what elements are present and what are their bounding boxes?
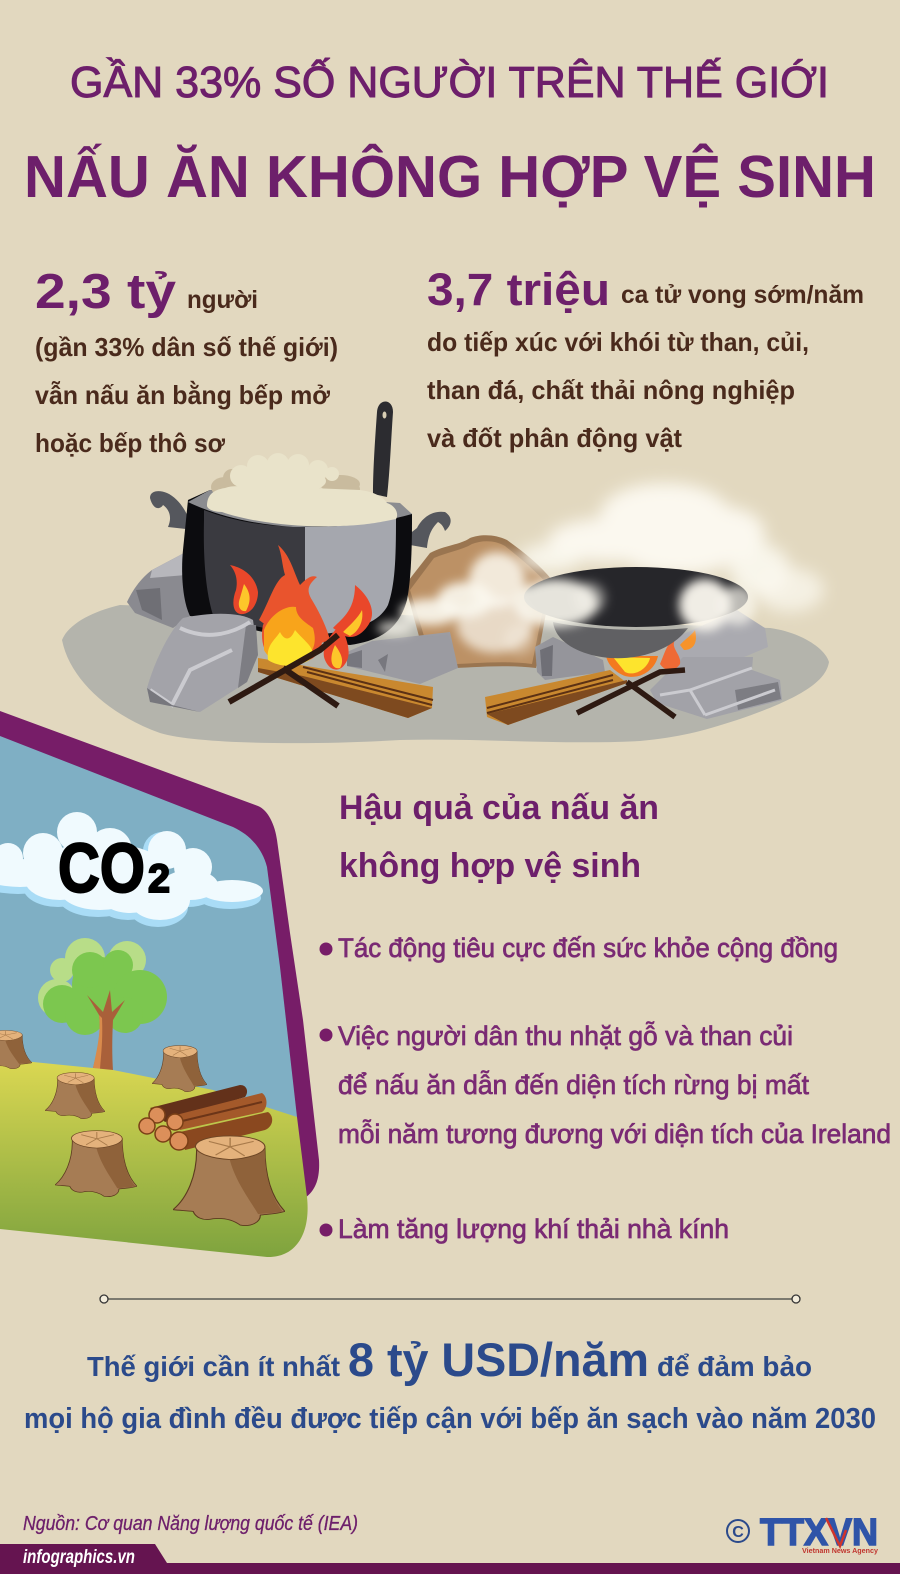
heading: consequences: Hậu quả của nấu ăn [339, 789, 659, 827]
stat: 3,7 million deaths: than đá, chất thải nông nghiệp [427, 375, 795, 405]
bullet 2: để nấu ăn dẫn đến diện tích rừng bị mất [338, 1069, 809, 1100]
pot [182, 490, 412, 645]
stat: 2,3 billion people: 2,3 tỷ [35, 265, 176, 319]
small fire [606, 630, 696, 677]
centre rock under pot [347, 632, 458, 684]
left log [258, 658, 433, 718]
stat: 3,7 million deaths: và đốt phân động vật [427, 423, 682, 453]
bullet 2: Việc người dân thu nhặt gỗ và than củi [338, 1020, 793, 1051]
divider with end dots [100, 1295, 800, 1303]
source note: Nguồn: Cơ quan Năng lượng quốc tế (IEA) [23, 1513, 358, 1535]
tree stump, front left [55, 1131, 137, 1197]
bullet 2 [320, 1020, 891, 1149]
closing statement: 8 tỷ USD/năm [348, 1333, 649, 1386]
right-side back rock [670, 610, 768, 665]
smoke behind the wok [518, 483, 824, 612]
stat: 3,7 million deaths: ca tử vong sớm/năm [621, 281, 864, 309]
stat: 2,3 billion people: hoặc bếp thô sơ [35, 428, 225, 458]
footer band with site name [0, 1544, 900, 1574]
left pot handle [150, 491, 190, 529]
stat: 3,7 million deaths [427, 264, 864, 453]
stat: 3,7 million deaths: 3,7 triệu [427, 264, 610, 315]
tree stump, front right [173, 1136, 285, 1225]
title: GẦN 33% SỐ NGƯỜI TRÊN THẾ GIỚI [70, 56, 829, 107]
front-right rock [650, 657, 782, 719]
flame behind main fire [230, 545, 330, 650]
small fire crossed sticks [577, 670, 685, 717]
stat: 3,7 million deaths: do tiếp xúc với khói từ than, củi, [427, 327, 809, 357]
ladle handle [373, 402, 393, 497]
tree stump, middle left [45, 1072, 105, 1119]
CO2 label: 2 [148, 857, 170, 901]
heading: consequences: không hợp vệ sinh [339, 847, 641, 885]
illustration: open fire cooking [62, 402, 829, 743]
title [24, 56, 876, 210]
stat: 2,3 billion people: người [187, 286, 258, 314]
stat: 2,3 billion people [35, 265, 338, 458]
bullet 3: Làm tăng lượng khí thải nhà kính [338, 1214, 729, 1244]
large fire crossed sticks [229, 635, 338, 706]
wok [524, 567, 748, 658]
closing statement: để đảm bảo [657, 1351, 812, 1382]
smoke over wok, sack and pot [377, 552, 756, 656]
tree [38, 938, 167, 1071]
cloud with CO2 [0, 812, 263, 927]
right pot handle [408, 512, 451, 548]
panel: deforestation illustration [0, 711, 319, 1257]
closing statement [24, 1333, 876, 1435]
log pile [139, 1085, 272, 1150]
large fire [262, 585, 372, 670]
bullet list: consequences [320, 933, 891, 1244]
bullet 1: Tác động tiêu cực đến sức khỏe cộng đồng [338, 933, 838, 963]
tree stump, behind logs [152, 1045, 207, 1092]
logo: TTXVN: Vietnam News Agency [802, 1548, 878, 1555]
ground shadow [62, 605, 829, 743]
hill [0, 1058, 308, 1257]
logo: TTXVN: C [732, 1524, 744, 1541]
stat: 2,3 billion people: (gần 33% dân số thế giới) [35, 332, 338, 362]
right-side left rock [535, 637, 605, 680]
purple panel frame [0, 711, 319, 1198]
closing statement: mọi hộ gia đình đều được tiếp cận với bếp ăn sạch vào năm 2030 [24, 1403, 876, 1435]
closing statement: Thế giới cần ít nhất [87, 1351, 340, 1382]
tree stump, far left [0, 1030, 32, 1069]
logo: TTXVN: TTXVN [760, 1512, 878, 1554]
sky [0, 736, 297, 1140]
front left rock [147, 614, 258, 712]
right log [485, 670, 627, 725]
CO2 label: CO [58, 829, 145, 907]
sack of ash [405, 535, 552, 668]
back left rock [127, 552, 190, 628]
rice [207, 453, 397, 526]
title: NẤU ĂN KHÔNG HỢP VỆ SINH [24, 143, 876, 210]
footer band with site name: infographics.vn [23, 1547, 135, 1568]
stat: 2,3 billion people: vẫn nấu ăn bằng bếp mở [35, 380, 330, 410]
bullet 2: mỗi năm tương đương với diện tích của Ireland [338, 1118, 891, 1149]
heading: consequences [339, 789, 659, 885]
